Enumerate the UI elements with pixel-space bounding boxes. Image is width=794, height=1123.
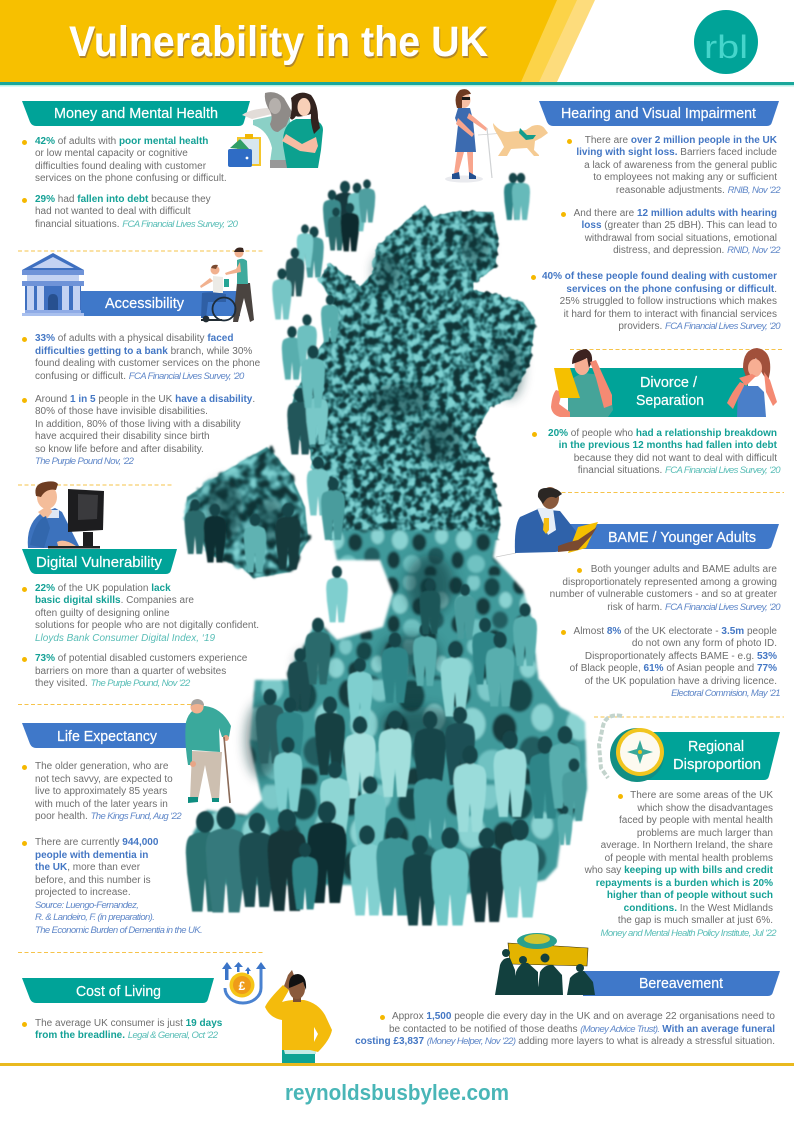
text: physical disability: difficulties getting to a bank branch, while 30% <box>35 346 252 356</box>
text: poor mental health <box>22 136 227 184</box>
logo: rbl: rbl <box>704 29 748 65</box>
wallet and clipboard <box>228 134 261 167</box>
text: 40 percent customer services <box>531 271 780 332</box>
text: breadline: from the breadline. Legal & General, Oct ‘22 <box>35 1030 217 1041</box>
text: older generation: live to approximately 85 years <box>35 786 167 797</box>
guide dog <box>493 123 548 156</box>
text: fallen into debt: had not wanted to deal with difficult <box>35 206 190 217</box>
text: hearing loss <box>561 208 780 256</box>
text: dementia: the UK, more than ever <box>35 862 140 873</box>
text: 1 in 5 disability: In addition, 80% of those living with a disability <box>35 419 241 430</box>
heading: Money and Mental Health <box>22 101 250 126</box>
text: relationship breakdown <box>532 428 780 476</box>
text: dementia: There are currently 944,000 <box>35 837 158 848</box>
text: photo ID <box>561 626 780 699</box>
text: older generation <box>22 761 182 822</box>
text: older generation: The older generation, who are <box>35 761 168 772</box>
dashed divider: accessibility <box>18 250 263 252</box>
text: digital skills: basic digital skills. Companies are <box>35 595 194 606</box>
text: relationship breakdown: because they did not want to deal with difficult <box>574 453 777 464</box>
text: 40 percent customer services: 40% of these people found dealing with customer <box>542 271 777 282</box>
bottom row of south coast <box>186 811 224 912</box>
text: 1 in 5 disability: 80% of those have invisible disabilities. <box>35 406 208 417</box>
icon: bank building <box>22 253 84 316</box>
text: hearing loss: loss (greater than 25 dBH). This can lead to <box>582 220 777 231</box>
front woman <box>282 93 323 168</box>
text: photo ID: Almost 8% of the UK electorate - 3.5m people <box>574 626 777 637</box>
icon: pound coin and arrows: £ <box>239 979 246 993</box>
dashed divider: digital <box>18 484 173 486</box>
text: bereavement costs: Approx 1,500 people die every day in the UK and on average 22 organisations need to <box>392 1011 775 1022</box>
text: regional disadvantages <box>584 790 776 939</box>
text: regional disadvantages: faced by people with mental health <box>619 815 773 826</box>
west coast <box>287 388 313 454</box>
text: bereavement costs <box>355 1011 775 1047</box>
text: photo ID: do not own any form of photo ID. <box>632 638 777 649</box>
header banner <box>0 0 794 86</box>
text: younger and BAME adults: disproportionately represented among a growing <box>562 577 777 588</box>
text: regional disadvantages: There are some areas of the UK <box>630 790 773 801</box>
carer <box>225 248 254 322</box>
text: breadline <box>22 1018 222 1041</box>
text: poor mental health: services on the phone confusing or difficult. <box>35 173 227 184</box>
heading: Money and Mental Health: Money and Mental Health <box>54 105 218 122</box>
icon: pallbearers carrying coffin <box>495 933 595 995</box>
text: older generation: not tech savvy, are expected to <box>35 774 173 785</box>
text: regional disadvantages: of people with mental health problems <box>605 853 773 864</box>
text: fallen into debt: 29% had fallen into debt because they <box>35 194 211 204</box>
heading: Bereavement: Bereavement <box>639 975 724 992</box>
text: younger and BAME adults: number of vulnerable customers - and so at greater <box>550 589 777 600</box>
text: younger and BAME adults <box>550 564 780 613</box>
text: regional disadvantages: the gap is much smaller at just 6%. <box>618 915 773 926</box>
text: physical disability: found dealing with customer services on the phone <box>35 358 260 369</box>
icon: two worried women <box>228 92 323 168</box>
text: younger and BAME adults: risk of harm. FCA Financial Lives Survey, ‘20 <box>607 602 780 613</box>
text: relationship breakdown: 20% of people who had a relationship breakdown <box>548 428 777 439</box>
text: 1 in 5 disability <box>22 394 255 467</box>
islands <box>334 181 356 237</box>
text: regional disadvantages: conditions. In the West Midlands <box>624 903 773 914</box>
text: 1 in 5 disability: The Purple Pound Nov, ‘22 <box>35 456 133 467</box>
text: regional disadvantages: problems are much larger than <box>637 828 773 839</box>
text: fallen into debt: financial situations. FCA Financial Lives Survey, ‘20 <box>35 218 237 230</box>
text: photo ID: Electoral Commision, May ‘21 <box>671 688 780 699</box>
heading: Digital Vulnerability: Digital Vulnerability <box>36 554 162 571</box>
crowd map of the UK <box>184 173 587 925</box>
text: digital skills: Lloyds Bank Consumer Digital Index, ‘19 <box>35 633 215 644</box>
icon: man in blue suit reading <box>515 487 598 553</box>
icon: blind woman with guide dog <box>445 89 548 182</box>
icon: stressed man with clipboard <box>551 349 613 417</box>
heading: Bereavement <box>583 971 780 996</box>
heading: Regional Disproportion: Regional <box>688 738 744 755</box>
text: older generation: with much of the later years in <box>35 799 168 810</box>
text: 40 percent customer services: 25% struggled to follow instructions which makes <box>560 296 777 307</box>
heading: Life Expectancy <box>22 723 196 748</box>
dashed divider: life expectancy <box>18 704 205 706</box>
text: photo ID: of Black people, 61% of Asian people and 77% <box>570 663 777 674</box>
text: dementia: people with dementia in <box>35 850 148 861</box>
heading: Hearing and Visual Impairment <box>539 101 779 126</box>
footer rule <box>0 1063 794 1066</box>
text: dementia: The Economic Burden of Dementia in the UK. <box>35 925 202 936</box>
heading: Divorce / Separation <box>568 368 748 417</box>
text: sight loss: living with sight loss. Barriers faced include <box>576 147 777 158</box>
faint pointer line <box>496 553 516 557</box>
icon: stressed woman <box>727 348 777 417</box>
midlands and wales <box>347 658 373 724</box>
text: 40 percent customer services: providers. FCA Financial Lives Survey, ‘20 <box>618 321 780 332</box>
text: disabled customers: they visited. The Purple Pound, Nov ‘22 <box>35 678 190 689</box>
text: digital skills <box>22 583 259 644</box>
dashed divider: regional <box>594 716 784 718</box>
woman <box>452 89 487 179</box>
text: dementia: projected to increase. <box>35 887 131 898</box>
icon: man pushing wheelchair <box>200 248 254 322</box>
icon: pound coin and arrows <box>222 962 266 1003</box>
icon: older man with cane <box>185 699 231 803</box>
text: 40 percent customer services: it hard for them to interact with financial services <box>564 308 777 320</box>
text: photo ID: Disproportionately affects BAME - e.g. 53% <box>585 651 777 662</box>
heading: Accessibility <box>80 291 240 316</box>
heading: Accessibility: Accessibility <box>105 295 184 312</box>
text: disabled customers <box>22 653 247 689</box>
text: physical disability: 33% of adults with a physical disability faced <box>35 333 233 344</box>
heading: BAME / Younger Adults: BAME / Younger Adults <box>608 529 756 546</box>
text: photo ID: of the UK population have a driving licence. <box>585 676 777 687</box>
heading: Life Expectancy: Life Expectancy <box>57 728 157 745</box>
text: poor mental health: 42% of adults with poor mental health <box>35 136 208 147</box>
text: dementia <box>22 837 202 936</box>
text: regional disadvantages: which show the disadvantages <box>637 803 773 814</box>
text: physical disability: confusing or difficult. FCA Financial Lives Survey, ‘20 <box>35 370 244 382</box>
text: regional disadvantages: who say keeping up with bills and credit <box>585 865 773 876</box>
text: bereavement costs: costing £3,837 (Money Helper, Nov ‘22) adding more layers to what is already a stressful situation. <box>355 1036 775 1047</box>
text: dementia: Source: Luengo-Fernandez, <box>35 900 138 911</box>
heading: Cost of Living <box>22 978 214 1003</box>
text: disabled customers: barriers on more than a quarter of websites <box>35 666 226 677</box>
text: regional disadvantages: Money and Mental Health Policy Institute, Jul ‘22 <box>600 928 776 939</box>
text: sight loss: reasonable adjustments. RNIB, Nov ‘22 <box>616 184 780 196</box>
text: disabled customers: 73% of potential disabled customers experience <box>35 653 247 664</box>
text: digital skills: 22% of the UK population lack <box>35 583 171 594</box>
wheelchair user <box>200 265 236 322</box>
text: dementia: R. & Landeiro, F. (in preparation). <box>35 912 154 923</box>
text: digital skills: often guilty of designing online <box>35 608 170 619</box>
text: sight loss <box>567 134 780 196</box>
icon: worried man in yellow shirt <box>265 970 332 1063</box>
text: 40 percent customer services: services on the phone confusing or difficult. <box>566 284 777 294</box>
heading: BAME / Younger Adults <box>565 524 779 549</box>
text: regional disadvantages: average. In Northern Ireland, the share <box>601 840 773 851</box>
text: 1 in 5 disability: so know life before and after disability. <box>35 444 204 455</box>
footer website: reynoldsbusbylee.com <box>285 1080 509 1105</box>
flowers <box>517 933 557 949</box>
text: 1 in 5 disability: Around 1 in 5 people in the UK have a disability. <box>35 394 255 405</box>
icon: compass on a chain <box>599 715 664 782</box>
dashed divider: divorce <box>570 348 784 350</box>
text: digital skills: solutions for people who are not digitally confident. <box>35 620 259 631</box>
text: hearing loss: distress, and depression. RNID, Nov ‘22 <box>613 245 780 256</box>
heading: Divorce / Separation: Separation <box>636 392 704 409</box>
text: sight loss: a lack of awareness from the general public <box>584 160 777 170</box>
text: 1 in 5 disability: have acquired their disability since birth <box>35 431 210 442</box>
back woman <box>242 92 292 168</box>
text: bereavement costs: be contacted to be notified of those deaths (Money Advice Trust). With an average funeral <box>389 1024 775 1035</box>
heading: Hearing and Visual Impairment: Hearing and Visual Impairment <box>561 105 757 122</box>
text: sight loss: to employees not making any or sufficient <box>593 172 777 183</box>
text: hearing loss: And there are 12 million adults with hearing <box>574 208 777 219</box>
text: fallen into debt <box>22 194 238 230</box>
heading: Regional Disproportion <box>640 732 780 780</box>
dashed divider: BAME <box>555 492 784 494</box>
heading: Cost of Living: Cost of Living <box>76 983 161 1000</box>
text: regional disadvantages: repayments is a burden which is 20% <box>596 878 773 889</box>
text: hearing loss: withdrawal from social situations, emotional <box>585 233 777 244</box>
text: regional disadvantages: higher than of people without such <box>607 890 773 901</box>
northern ireland <box>184 499 206 554</box>
heading: Divorce / Separation: Divorce / <box>640 374 698 391</box>
pallbearers <box>495 949 595 995</box>
icon: man at computer <box>28 481 104 548</box>
dashed divider: cost of living <box>18 952 263 954</box>
text: older generation: poor health. The Kings Fund, Aug ‘22 <box>35 811 181 822</box>
title: Vulnerability in the UK <box>69 18 488 66</box>
logo: rbl <box>694 10 758 74</box>
text: physical disability <box>22 333 260 382</box>
coffin <box>508 943 588 966</box>
text: dementia: before, and this number is <box>35 875 151 886</box>
text: relationship breakdown: in the previous 12 months had fallen into debt <box>559 440 777 451</box>
text: poor mental health: difficulties found dealing with customer <box>35 161 206 172</box>
text: relationship breakdown: financial situations. FCA Financial Lives Survey, ‘20 <box>578 465 780 476</box>
text: breadline: The average UK consumer is just 19 days <box>35 1018 222 1029</box>
heading: Regional Disproportion: Disproportion <box>673 756 761 773</box>
text: poor mental health: or low mental capacity or cognitive <box>35 148 188 159</box>
heading: Digital Vulnerability <box>22 549 177 574</box>
text: sight loss: There are over 2 million people in the UK <box>585 134 777 146</box>
text: younger and BAME adults: Both younger adults and BAME adults are <box>591 564 777 575</box>
